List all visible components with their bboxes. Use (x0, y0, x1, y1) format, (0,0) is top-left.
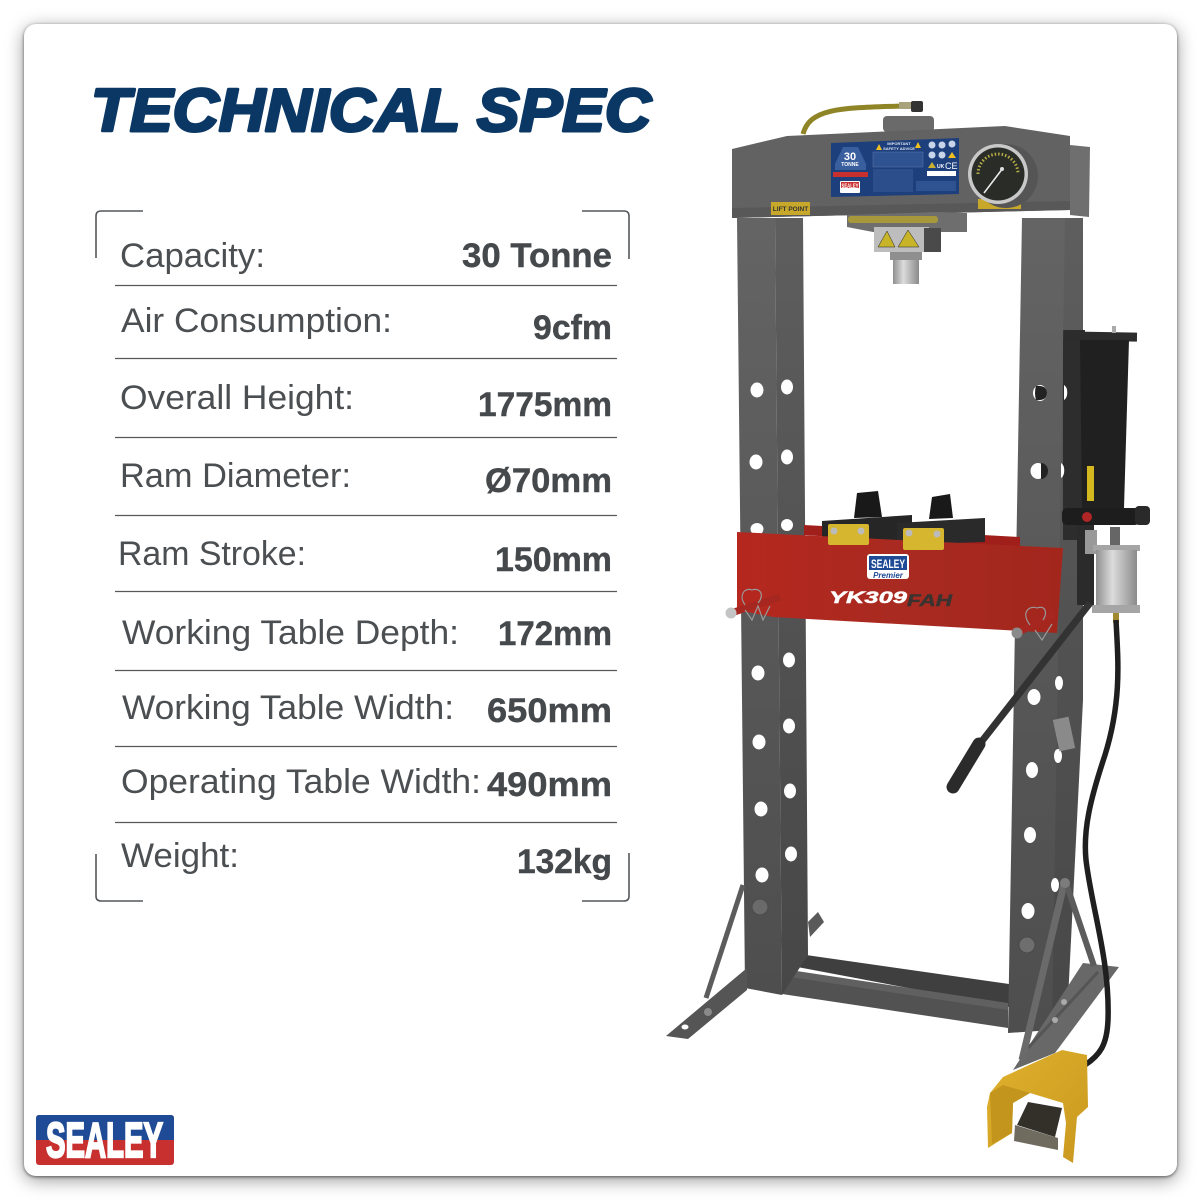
row: working table width: Working Table Width: (122, 689, 454, 727)
row: ram diameter: Ø70mm (485, 462, 612, 500)
red table bed: FAH (907, 591, 953, 610)
spec table (96, 211, 629, 901)
premier logo badge (867, 554, 909, 580)
right column (1008, 218, 1085, 1033)
premier logo badge: SEALEY (871, 557, 905, 571)
left foot (666, 885, 747, 1039)
corner brackets (96, 211, 629, 901)
title: TECHNICAL SPEC (91, 77, 653, 144)
row: operating table width: Operating Table Width: (121, 763, 481, 801)
row: working table depth: 172mm (498, 615, 612, 653)
rear table tray (804, 525, 1020, 550)
row: overall height: Overall Height: (120, 379, 354, 417)
row: air consumption: 9cfm (533, 309, 612, 347)
row: ram diameter (120, 457, 612, 500)
pressure gauge (968, 144, 1038, 208)
row: overall height (120, 379, 612, 424)
mounting plates (828, 524, 944, 550)
model number: YK309 (829, 588, 908, 607)
sealey logo: SEALEY (46, 1114, 163, 1168)
air pump cylinder (1062, 326, 1150, 605)
row: overall height: 1775mm (478, 386, 612, 424)
safety label panel: 30 (844, 151, 856, 163)
pump handle (953, 603, 1090, 787)
red table bed (737, 524, 1063, 633)
row: working table depth (122, 614, 612, 653)
illustration: hydraulic press (666, 101, 1150, 1163)
safety label panel: UK (937, 164, 945, 170)
safety label panel (831, 138, 959, 197)
ram assembly (847, 212, 967, 284)
row: ram stroke: Ram Stroke: (118, 535, 306, 573)
row: operating table width (121, 763, 612, 804)
row: weight: 132kg (517, 843, 612, 881)
v-blocks on table (822, 491, 985, 545)
right foot (1013, 878, 1119, 1070)
row: capacity (120, 237, 612, 275)
head beam (732, 101, 1090, 218)
air hose (1085, 620, 1118, 1065)
lift point labels (771, 199, 1021, 215)
safety label panel: SAFETY ADVICE (883, 146, 915, 151)
row: air consumption (121, 302, 612, 347)
lift point labels: LIFT POINT (773, 206, 808, 213)
premier logo badge: Premier (873, 571, 904, 580)
row: working table depth: Working Table Depth: (122, 614, 459, 652)
row dividers (115, 286, 617, 822)
foot pedal (987, 1050, 1088, 1163)
row: ram diameter: Ram Diameter: (120, 457, 351, 495)
row: weight: Weight: (121, 837, 239, 875)
air filter (1092, 527, 1140, 623)
row: weight (121, 837, 612, 881)
sealey logo (36, 1114, 174, 1168)
rear legs and cross member (782, 912, 1009, 1028)
safety label panel: CE (945, 161, 958, 171)
table pins (726, 589, 1054, 640)
safety label panel: TONNE (841, 162, 859, 168)
row: ram stroke: 150mm (495, 541, 612, 579)
row: capacity: 30 Tonne (462, 237, 612, 275)
safety label panel: SEALEY (842, 184, 858, 190)
row: working table width (122, 689, 612, 730)
row: working table width: 650mm (487, 692, 612, 730)
row: ram stroke (118, 535, 612, 579)
row: capacity: Capacity: (120, 237, 265, 275)
row: air consumption: Air Consumption: (121, 302, 392, 340)
left column (737, 218, 808, 995)
row: operating table width: 490mm (487, 766, 612, 804)
safety label panel: IMPORTANT (887, 141, 911, 146)
